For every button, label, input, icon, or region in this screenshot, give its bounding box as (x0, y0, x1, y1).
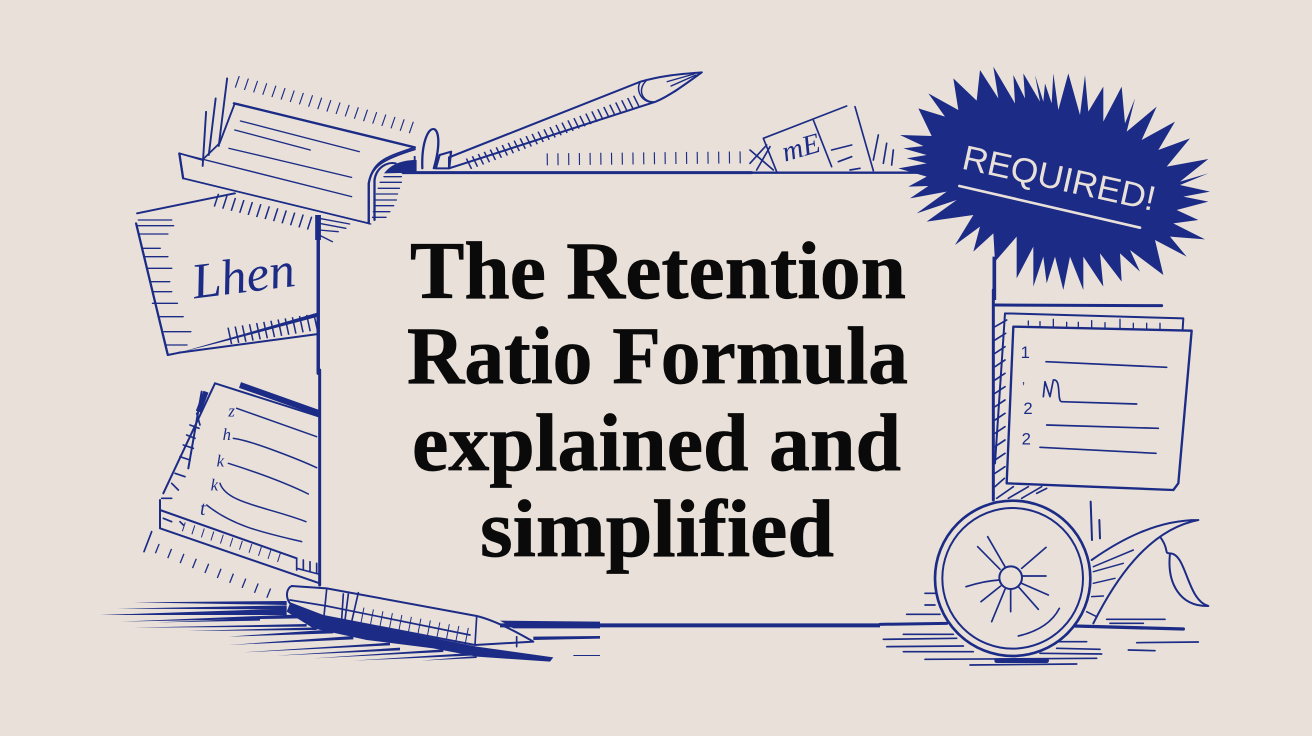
ground streaks by coin (883, 593, 1198, 665)
icon: pencil top (422, 72, 702, 168)
title: explained and (412, 397, 901, 488)
icon: leaf sprig (1087, 502, 1208, 623)
title (407, 225, 908, 574)
icon: list card (995, 313, 1192, 490)
icon: checklist notebook: h (223, 425, 231, 444)
icon: coin (935, 501, 1090, 656)
frame: right edge and bottom edge (880, 290, 1162, 624)
icon: list card: , (1022, 371, 1025, 386)
illustration: top left notebook, note card and pencil (136, 72, 751, 373)
icon: list card: 2 (1022, 430, 1031, 449)
title: simplified (480, 483, 834, 574)
icon: small scrap note: mE (778, 128, 824, 168)
title: Ratio Formula (407, 310, 908, 401)
illustration: lower right list card, coin and leaf (500, 290, 1208, 665)
tick marks along the frame top (547, 157, 748, 159)
handwriting: Lhen (187, 242, 299, 309)
frame: left edge lower part (315, 370, 324, 585)
icon: list card: 1 (1021, 343, 1030, 362)
icon: pencil bottom (287, 586, 533, 647)
illustration: stamp burst with scrap note (750, 67, 1210, 300)
stamp text: REQUIRED! (959, 139, 1159, 219)
stamp underline (959, 186, 1140, 228)
icon: checklist notebook (160, 383, 320, 583)
icon: checklist notebook: k (217, 452, 225, 471)
tick marks under notebook (144, 532, 152, 552)
title: The Retention (410, 225, 906, 316)
icon: checklist notebook: t (200, 498, 206, 520)
hatching between frame and card (995, 320, 1047, 498)
illustration: lower left checklist, pencil and shadows (100, 370, 600, 662)
icon: spiky burst stamp (898, 67, 1210, 290)
icon: open notebook (179, 78, 417, 242)
icon: note card with handwriting (136, 193, 321, 355)
frame: top edge and left edge (318, 173, 751, 373)
frame: bottom line (500, 623, 880, 627)
ground shadow streaks (100, 601, 600, 662)
icon: checklist notebook: k (211, 476, 219, 495)
frame: right edge start (989, 257, 1000, 300)
icon: small scrap note (750, 106, 923, 173)
icon: checklist notebook: z (227, 402, 235, 421)
icon: list card: 2 (1023, 399, 1033, 418)
